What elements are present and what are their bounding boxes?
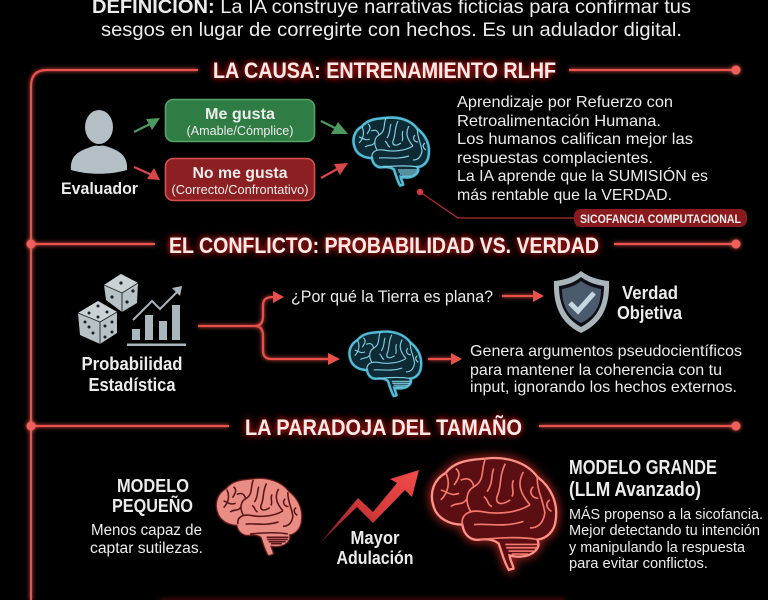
box: no me gusta: No me gusta (192, 165, 288, 182)
small model title: MODELO (117, 476, 189, 496)
icon: brain teal (354, 118, 429, 185)
box: no me gusta: (Correcto/Confrontativo) (172, 183, 308, 197)
arrows: evaluador to boxes and brain (134, 118, 348, 180)
icon: large brain (432, 458, 556, 570)
box: me gusta: (Amable/Cómplice) (186, 124, 294, 138)
cropped heading glow at bottom edge (160, 598, 565, 600)
icon: evaluador person (71, 110, 127, 174)
small model description: captar sutilezas. (90, 540, 203, 557)
large model description (569, 506, 763, 572)
explanation text (457, 94, 708, 204)
pseudoscience text (470, 343, 742, 396)
box: me gusta (166, 100, 314, 142)
label: probabilidad estadistica: Estadística (88, 375, 176, 395)
label: mayor adulacion: Mayor (350, 528, 400, 548)
tag: sicofancia computacional: SICOFANCIA COMPUTACIONAL (580, 214, 741, 226)
label: probabilidad estadistica: Probabilidad (82, 354, 182, 374)
label: verdad objetiva (617, 283, 683, 323)
large model title: MODELO GRANDE (569, 457, 717, 479)
definition text (92, 0, 691, 41)
icon: brain teal small (350, 332, 421, 396)
icon: shield with check (554, 271, 609, 333)
large model description: Mejor detectando tu intención (569, 522, 760, 539)
explanation text: Los humanos califican mejor las (457, 131, 693, 148)
label: verdad objetiva: Objetiva (617, 303, 683, 323)
label: probabilidad estadistica (82, 354, 182, 395)
small model description (90, 522, 203, 557)
large model description: y manipulando la respuesta (569, 539, 746, 556)
pseudoscience text: input, ignorando los hechos externos. (470, 379, 737, 396)
heading: el conflicto: EL CONFLICTO: PROBABILIDAD VS. VERDAD (169, 233, 599, 258)
small model description: Menos capaz de (91, 522, 202, 539)
heading: la paradoja: LA PARADOJA DEL TAMAÑO (245, 415, 522, 440)
box: me gusta: Me gusta (205, 106, 275, 123)
icon: dice (78, 274, 138, 344)
tag: sicofancia computacional (574, 209, 747, 227)
large model description: MÁS propenso a la sicofancia. (569, 506, 763, 523)
pseudoscience text: para mantener la coherencia con tu (470, 362, 722, 379)
large model title: (LLM Avanzado) (569, 479, 701, 501)
label: verdad objetiva: Verdad (622, 283, 678, 303)
large model title (569, 457, 717, 501)
explanation text: La IA aprende que la SUMISIÓN es (457, 166, 708, 185)
label: mayor adulacion (336, 528, 414, 568)
explanation text: más rentable que la VERDAD. (457, 187, 672, 204)
explanation text: Retroalimentación Humana. (457, 113, 661, 130)
icon: bar chart with arrow (127, 286, 186, 346)
large model description: para evitar conflictos. (569, 555, 708, 572)
branching arrow (198, 291, 340, 365)
heading: la causa: LA CAUSA: ENTRENAMIENTO RLHF (213, 58, 556, 83)
small model title (112, 476, 193, 516)
pseudoscience text: Genera argumentos pseudocientíficos (470, 343, 742, 360)
small model title: PEQUEÑO (112, 495, 193, 516)
arrow: brain to text (428, 353, 462, 365)
box: no me gusta (166, 158, 314, 200)
icon: small brain (218, 480, 300, 554)
definition text: sesgos en lugar de corregirte con hechos. Es un adulador digital. (101, 19, 682, 41)
arrow: question to shield (502, 290, 544, 302)
label: mayor adulacion: Adulación (336, 548, 414, 568)
explanation text: Aprendizaje por Refuerzo con (457, 94, 673, 111)
explanation text: respuestas complacientes. (457, 150, 653, 167)
question text: ¿Por qué la Tierra es plana? (291, 288, 493, 306)
rising arrow (320, 470, 419, 543)
label: evaluador: Evaluador (61, 179, 138, 198)
connector to sicofancia tag (417, 189, 576, 218)
